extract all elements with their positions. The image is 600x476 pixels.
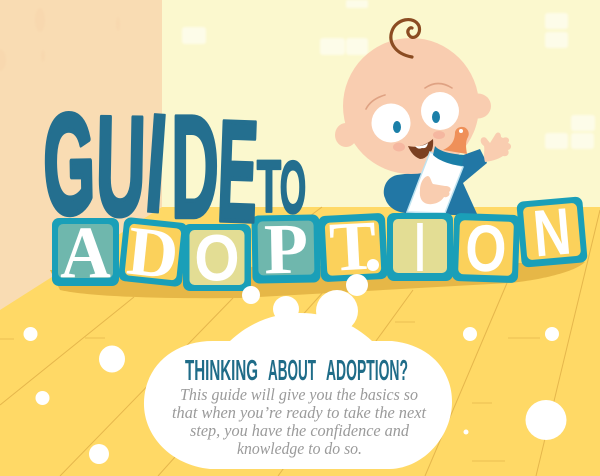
decorative white dots (24, 259, 566, 464)
wall: left corner (0, 0, 162, 310)
block O second: O (464, 211, 508, 286)
block T: T (328, 207, 378, 287)
block shadow (50, 262, 585, 298)
cloud heading: ABOUT (268, 355, 316, 387)
cloud heading (185, 355, 408, 387)
block I: I (415, 208, 425, 286)
baby left hand (420, 176, 451, 204)
baby left ear (335, 123, 357, 147)
title: GUIDE TO: U (95, 86, 147, 246)
title: GUIDE TO: G (42, 86, 96, 244)
floor (0, 207, 600, 476)
title: GUIDE TO: E (215, 91, 261, 253)
baby left sleeve and body (384, 149, 487, 216)
baby cheek (393, 142, 405, 152)
cloud callout (144, 290, 452, 469)
baby mouth (408, 139, 433, 159)
wall: right (0, 0, 600, 215)
title: GUIDE TO: O (280, 147, 306, 230)
baby brows (366, 84, 452, 109)
title: GUIDE TO: D (171, 86, 219, 249)
baby right pupil (432, 111, 440, 123)
block P: P (263, 209, 309, 289)
floor plank lines (0, 207, 600, 476)
bottle nipple highlight (459, 129, 463, 133)
cloud body text: knowledge to do so. (237, 439, 362, 458)
cloud callout: ADOPTION? (326, 355, 408, 387)
block N: N (530, 193, 574, 271)
cloud body text: that when you’re ready to take the next (172, 403, 426, 422)
baby (335, 20, 511, 216)
baby left eye (372, 104, 410, 142)
block O: O (194, 222, 240, 295)
bottle (407, 152, 463, 213)
block I (387, 208, 453, 286)
block A: A (60, 211, 111, 293)
cloud body text: This guide will give you the basics so (180, 385, 418, 404)
baby curl (391, 20, 420, 57)
block D: D (124, 213, 182, 294)
block P (251, 208, 321, 290)
baby teeth (415, 143, 428, 149)
block N (516, 192, 588, 272)
title: GUIDE TO (42, 84, 306, 253)
cloud body text (172, 385, 426, 458)
alphabet blocks (52, 192, 588, 295)
block O second (452, 210, 520, 286)
bottle collar (433, 146, 464, 166)
baby cheek right (433, 131, 445, 139)
baby right hand (481, 133, 511, 162)
block O (183, 222, 251, 295)
bottle nipple (443, 127, 469, 154)
cloud body text: step, you have the confidence and (190, 421, 410, 440)
wall faint pattern (0, 0, 595, 149)
title: GUIDE TO: I (140, 84, 172, 244)
cloud heading: THINKING (185, 355, 258, 387)
baby head (343, 38, 479, 174)
cloud shape (144, 290, 452, 469)
title: GUIDE TO: T (257, 145, 281, 228)
baby right eye (421, 92, 459, 130)
baby right ear (465, 94, 491, 118)
baby left pupil (393, 121, 401, 133)
